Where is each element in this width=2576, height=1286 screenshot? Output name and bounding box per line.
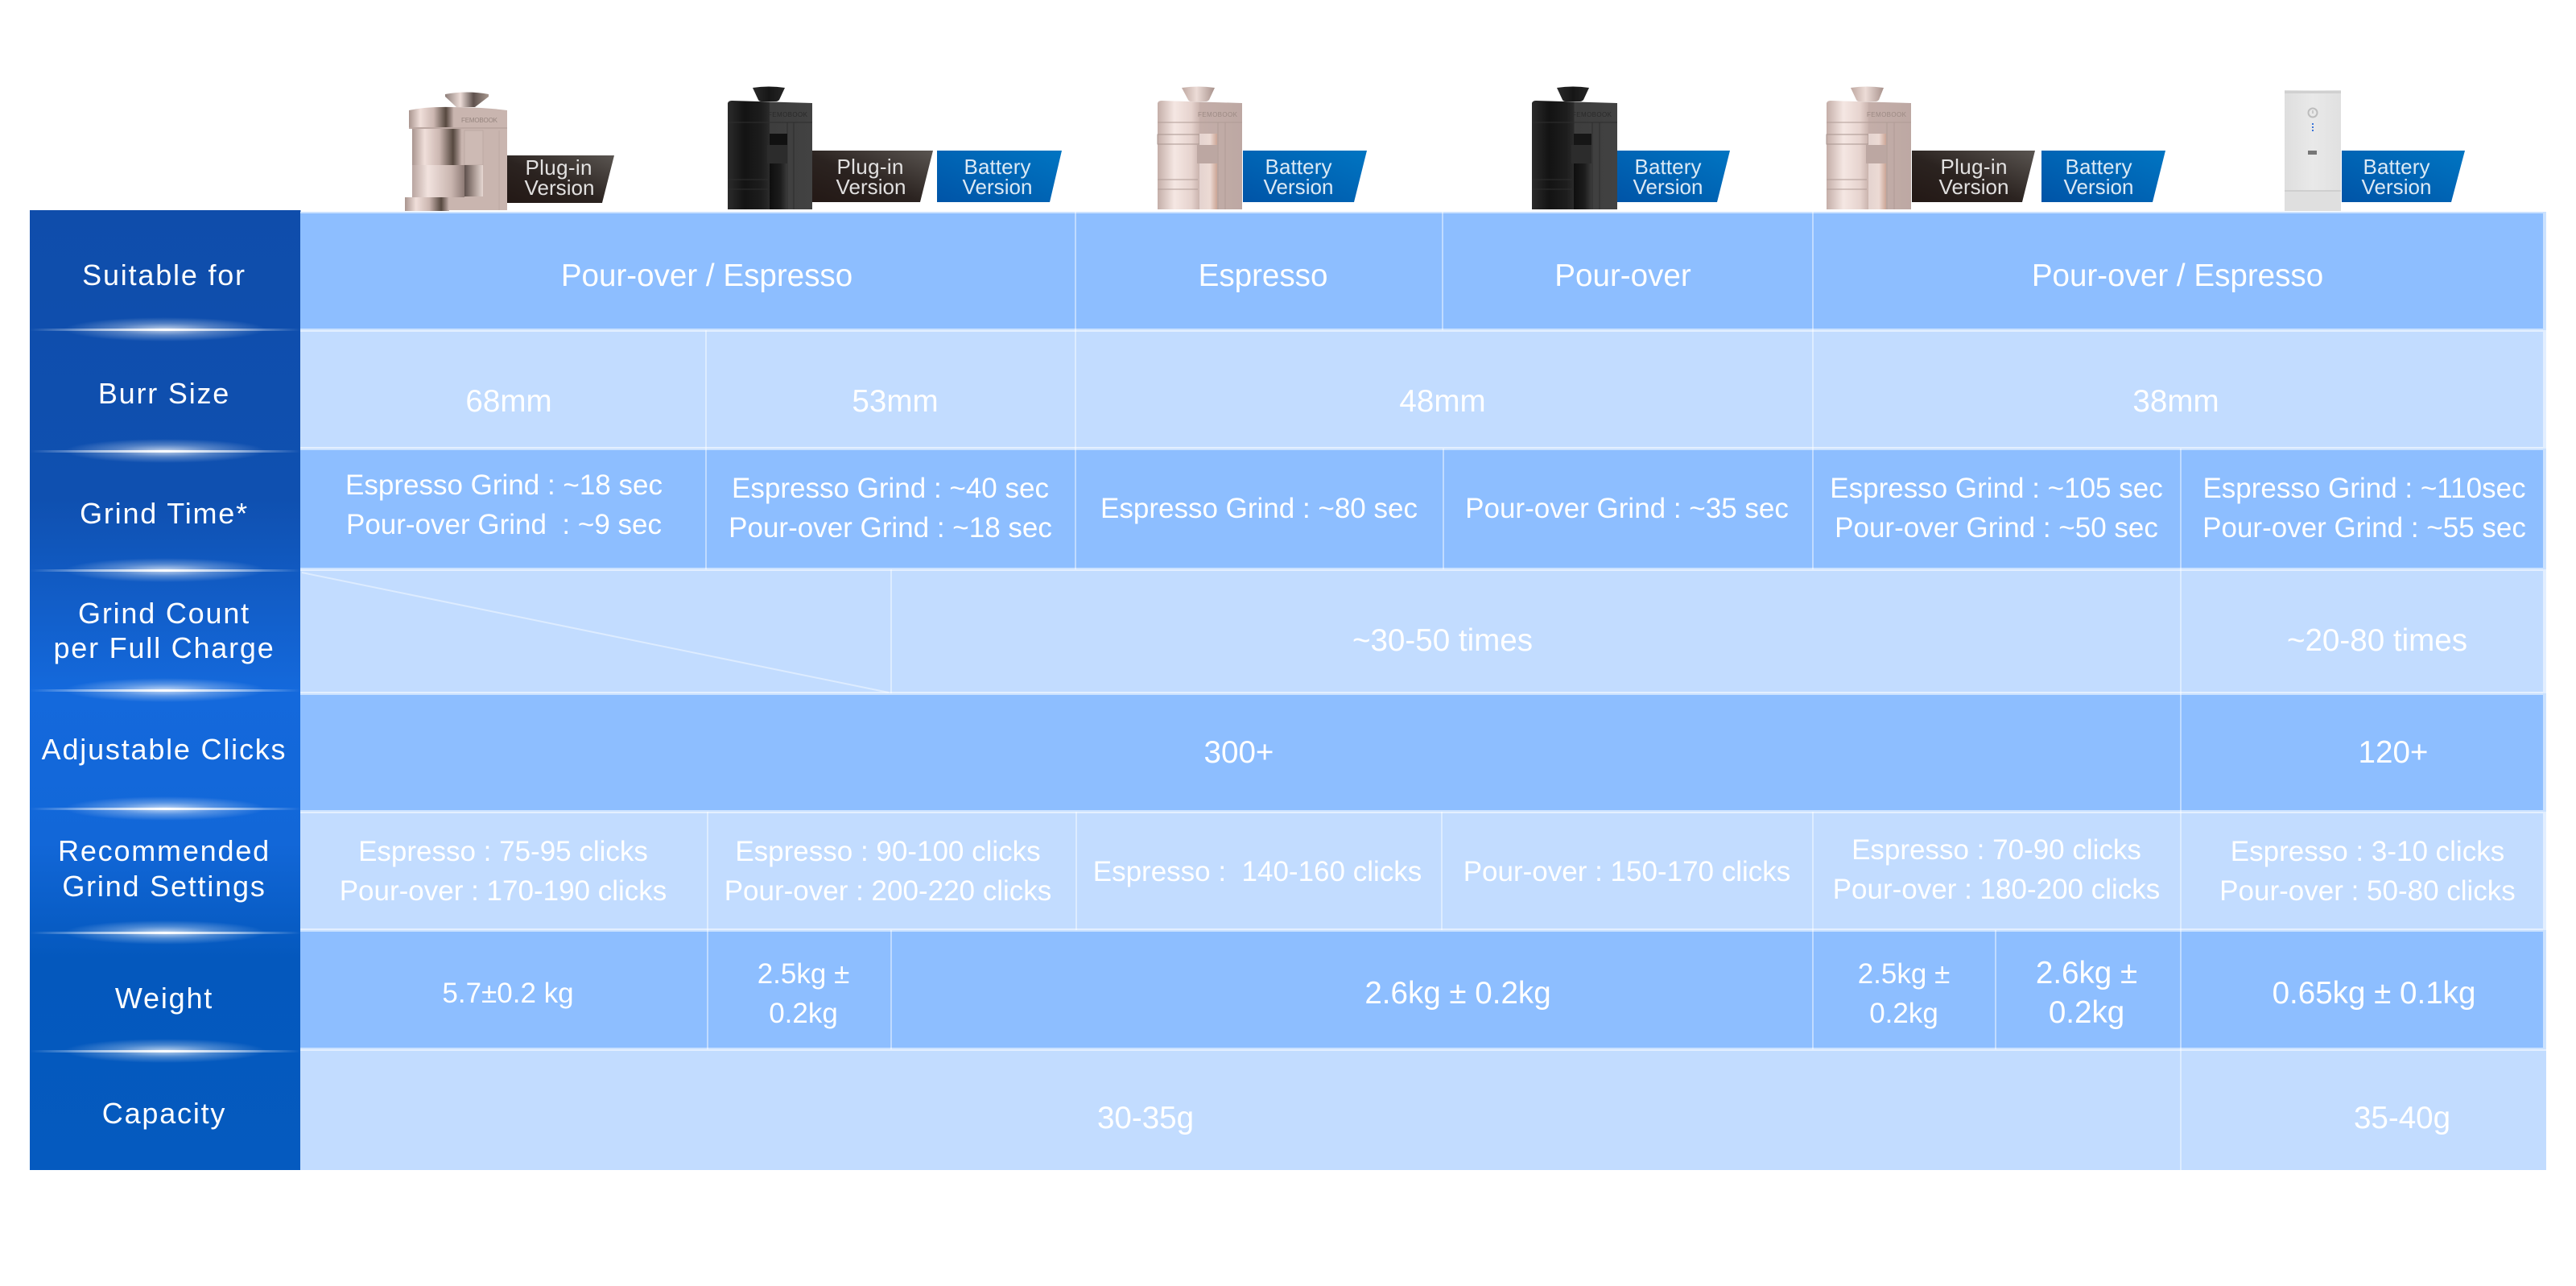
horizontal row separators — [300, 212, 2546, 1049]
label: Burr Size: Burr Size — [98, 377, 230, 410]
glow divider 3 — [30, 558, 301, 582]
cell: 300+: 300+ — [1204, 735, 1274, 770]
row: Suitable for — [300, 212, 2546, 330]
cell: 38mm settings: Pour-over : 180-200 clicks — [1833, 874, 2160, 905]
cell: 38mm: 38mm — [2132, 384, 2219, 419]
glow divider 5 — [30, 796, 301, 821]
cell: 48mm: 48mm — [1399, 384, 1486, 419]
cell: 120+: 120+ — [2359, 735, 2428, 770]
row: Grind Time — [300, 449, 2546, 569]
cell: portable grind time: Espresso Grind : ~110sec — [2202, 473, 2526, 504]
tag: battery, 48mm espresso: Version — [1264, 175, 1333, 199]
tag: plug-in, 38mm — [1912, 151, 2035, 202]
cell: 35-40g: 35-40g — [2354, 1101, 2450, 1135]
glow divider 1 — [30, 317, 301, 341]
icon: 53mm black grinder — [728, 87, 812, 209]
cell: 5.7kg: 5.7±0.2 kg — [442, 978, 574, 1009]
cell: 2.5kg first: 0.2kg — [769, 998, 838, 1029]
logo: grinder brand mark: FEMOBOOK — [1572, 111, 1612, 118]
cell: portable settings: Espresso : 3-10 clicks — [2231, 836, 2504, 867]
tag: battery, 53mm: Version — [963, 175, 1032, 199]
cell: 0.65kg: 0.65kg ± 0.1kg — [2273, 976, 2475, 1011]
cell: 38mm settings: Espresso : 70-90 clicks — [1852, 834, 2141, 866]
cell: pour-over settings: Pour-over : 150-170 clicks — [1463, 856, 1790, 887]
icon: 48mm black pour-over grinder — [1532, 87, 1617, 209]
cell: 68mm settings: Pour-over : 170-190 clicks — [340, 875, 667, 907]
label: Grind Count per Full Charge: Grind Count — [78, 597, 250, 630]
cell: 68mm settings: Espresso : 75-95 clicks — [358, 836, 648, 867]
cell: 2.5kg second: 0.2kg — [1869, 998, 1938, 1029]
cell: pour-over and espresso, small burrs: Pour-over / Espresso — [2032, 258, 2323, 293]
logo: grinder brand mark: FEMOBOOK — [461, 117, 498, 124]
tag: battery, 48mm espresso — [1243, 151, 1367, 202]
cell: 2.5kg second: 2.5kg ± — [1858, 958, 1950, 990]
cell: 53mm settings: Pour-over : 200-220 clicks — [724, 875, 1051, 907]
tag: battery, 38mm: Version — [2064, 175, 2133, 199]
cell: 53mm grind time: Espresso Grind : ~40 sec — [732, 473, 1049, 504]
tag: plug-in, 68mm — [507, 155, 614, 203]
tag: battery, 48mm espresso: Battery — [1265, 155, 1331, 179]
tag: battery, 53mm: Battery — [964, 155, 1030, 179]
label: Adjustable Clicks: Adjustable Clicks — [42, 733, 287, 766]
tag: battery, portable: Battery — [2363, 155, 2429, 179]
cell: 2.6kg second: 0.2kg — [2049, 995, 2124, 1030]
cell: 53mm settings: Espresso : 90-100 clicks — [735, 836, 1041, 867]
tag: battery, 48mm pour-over — [1617, 151, 1730, 202]
logo: grinder brand mark: FEMOBOOK — [1198, 111, 1238, 118]
tag: plug-in, 38mm: Plug-in — [1940, 155, 2008, 179]
panel: row labels sidebar — [30, 210, 301, 1170]
tag: plug-in, 68mm: Plug-in — [525, 155, 592, 180]
tag: battery, 53mm — [937, 151, 1062, 202]
cell: 68mm grind time: Espresso Grind : ~18 sec — [345, 469, 663, 501]
row: Burr Size — [300, 330, 2546, 449]
cell: 2.6kg: 2.6kg ± 0.2kg — [1364, 976, 1551, 1011]
glow divider 6 — [30, 920, 301, 945]
tag: battery, 48mm pour-over: Version — [1633, 175, 1703, 199]
tag: plug-in, 53mm: Plug-in — [837, 155, 903, 179]
icon: white portable grinder — [2285, 90, 2341, 211]
cell: espresso: Espresso — [1199, 258, 1327, 293]
logo: grinder brand mark: FEMOBOOK — [1867, 111, 1907, 118]
cell: 30-35g: 30-35g — [1097, 1101, 1194, 1135]
label: Grind Count per Full Charge: per Full Charge — [53, 631, 275, 664]
logo: grinder brand mark: FEMOBOOK — [768, 111, 808, 118]
row: Grind Count per Full Charge — [300, 569, 2546, 693]
row: Adjustable Clicks — [300, 693, 2546, 812]
cell: pour-over and espresso, large burrs: Pour-over / Espresso — [561, 258, 852, 293]
label: Weight: Weight — [115, 982, 213, 1015]
cell: pour-over: Pour-over — [1554, 258, 1691, 293]
row: Recommended Grind Settings — [300, 812, 2546, 930]
cell: portable grind time: Pour-over Grind : ~55 sec — [2202, 512, 2526, 544]
cell: 68mm grind time: Pour-over Grind : ~9 sec — [346, 509, 662, 540]
cell: espresso settings: Espresso : 140-160 clicks — [1093, 856, 1422, 887]
label: Recommended Grind Settings: Recommended — [58, 834, 270, 867]
icon: 68mm rose-gold grinder — [405, 92, 507, 211]
cell: pour-over grind time: Pour-over Grind : ~35 sec — [1465, 493, 1789, 524]
cell: 53mm grind time: Pour-over Grind : ~18 sec — [729, 512, 1052, 544]
label: Suitable for: Suitable for — [82, 258, 246, 292]
cell: espresso grind time: Espresso Grind : ~80 sec — [1100, 493, 1418, 524]
cell: 20-80 times: ~20-80 times — [2287, 623, 2467, 658]
label: Grind Time: Grind Time* — [80, 497, 249, 530]
cell: 30-50 times: ~30-50 times — [1352, 623, 1533, 658]
row: Weight — [300, 930, 2546, 1049]
icon: 38mm rose-gold grinder — [1827, 87, 1911, 209]
cell: 2.5kg first: 2.5kg ± — [758, 958, 849, 990]
cell: 53mm: 53mm — [852, 384, 939, 419]
cell: 38mm grind time: Pour-over Grind : ~50 sec — [1835, 512, 2158, 544]
cell: 2.6kg second: 2.6kg ± — [2036, 956, 2137, 990]
label: Capacity: Capacity — [102, 1097, 226, 1130]
tag: plug-in, 53mm: Version — [836, 175, 906, 199]
icon: 48mm rose-gold espresso grinder — [1158, 87, 1242, 209]
row: Capacity — [300, 1049, 2546, 1170]
tag: plug-in, 68mm: Version — [525, 176, 594, 200]
tag: battery, portable: Version — [2362, 175, 2431, 199]
cell: 38mm grind time: Espresso Grind : ~105 sec — [1830, 473, 2163, 504]
label: Recommended Grind Settings: Grind Settings — [62, 870, 266, 903]
tag: battery, portable — [2342, 151, 2465, 202]
glow divider 4 — [30, 678, 301, 702]
cell: portable settings: Pour-over : 50-80 clicks — [2219, 875, 2516, 907]
glow divider 2 — [30, 439, 301, 463]
tag: battery, 38mm — [2041, 151, 2165, 202]
tag: battery, 38mm: Battery — [2066, 155, 2132, 179]
cell: 68mm: 68mm — [465, 384, 552, 419]
tag: plug-in, 53mm — [812, 151, 933, 202]
tag: plug-in, 38mm: Version — [1938, 175, 2009, 199]
tag: battery, 48mm pour-over: Battery — [1634, 155, 1702, 179]
glow divider 7 — [30, 1039, 301, 1063]
